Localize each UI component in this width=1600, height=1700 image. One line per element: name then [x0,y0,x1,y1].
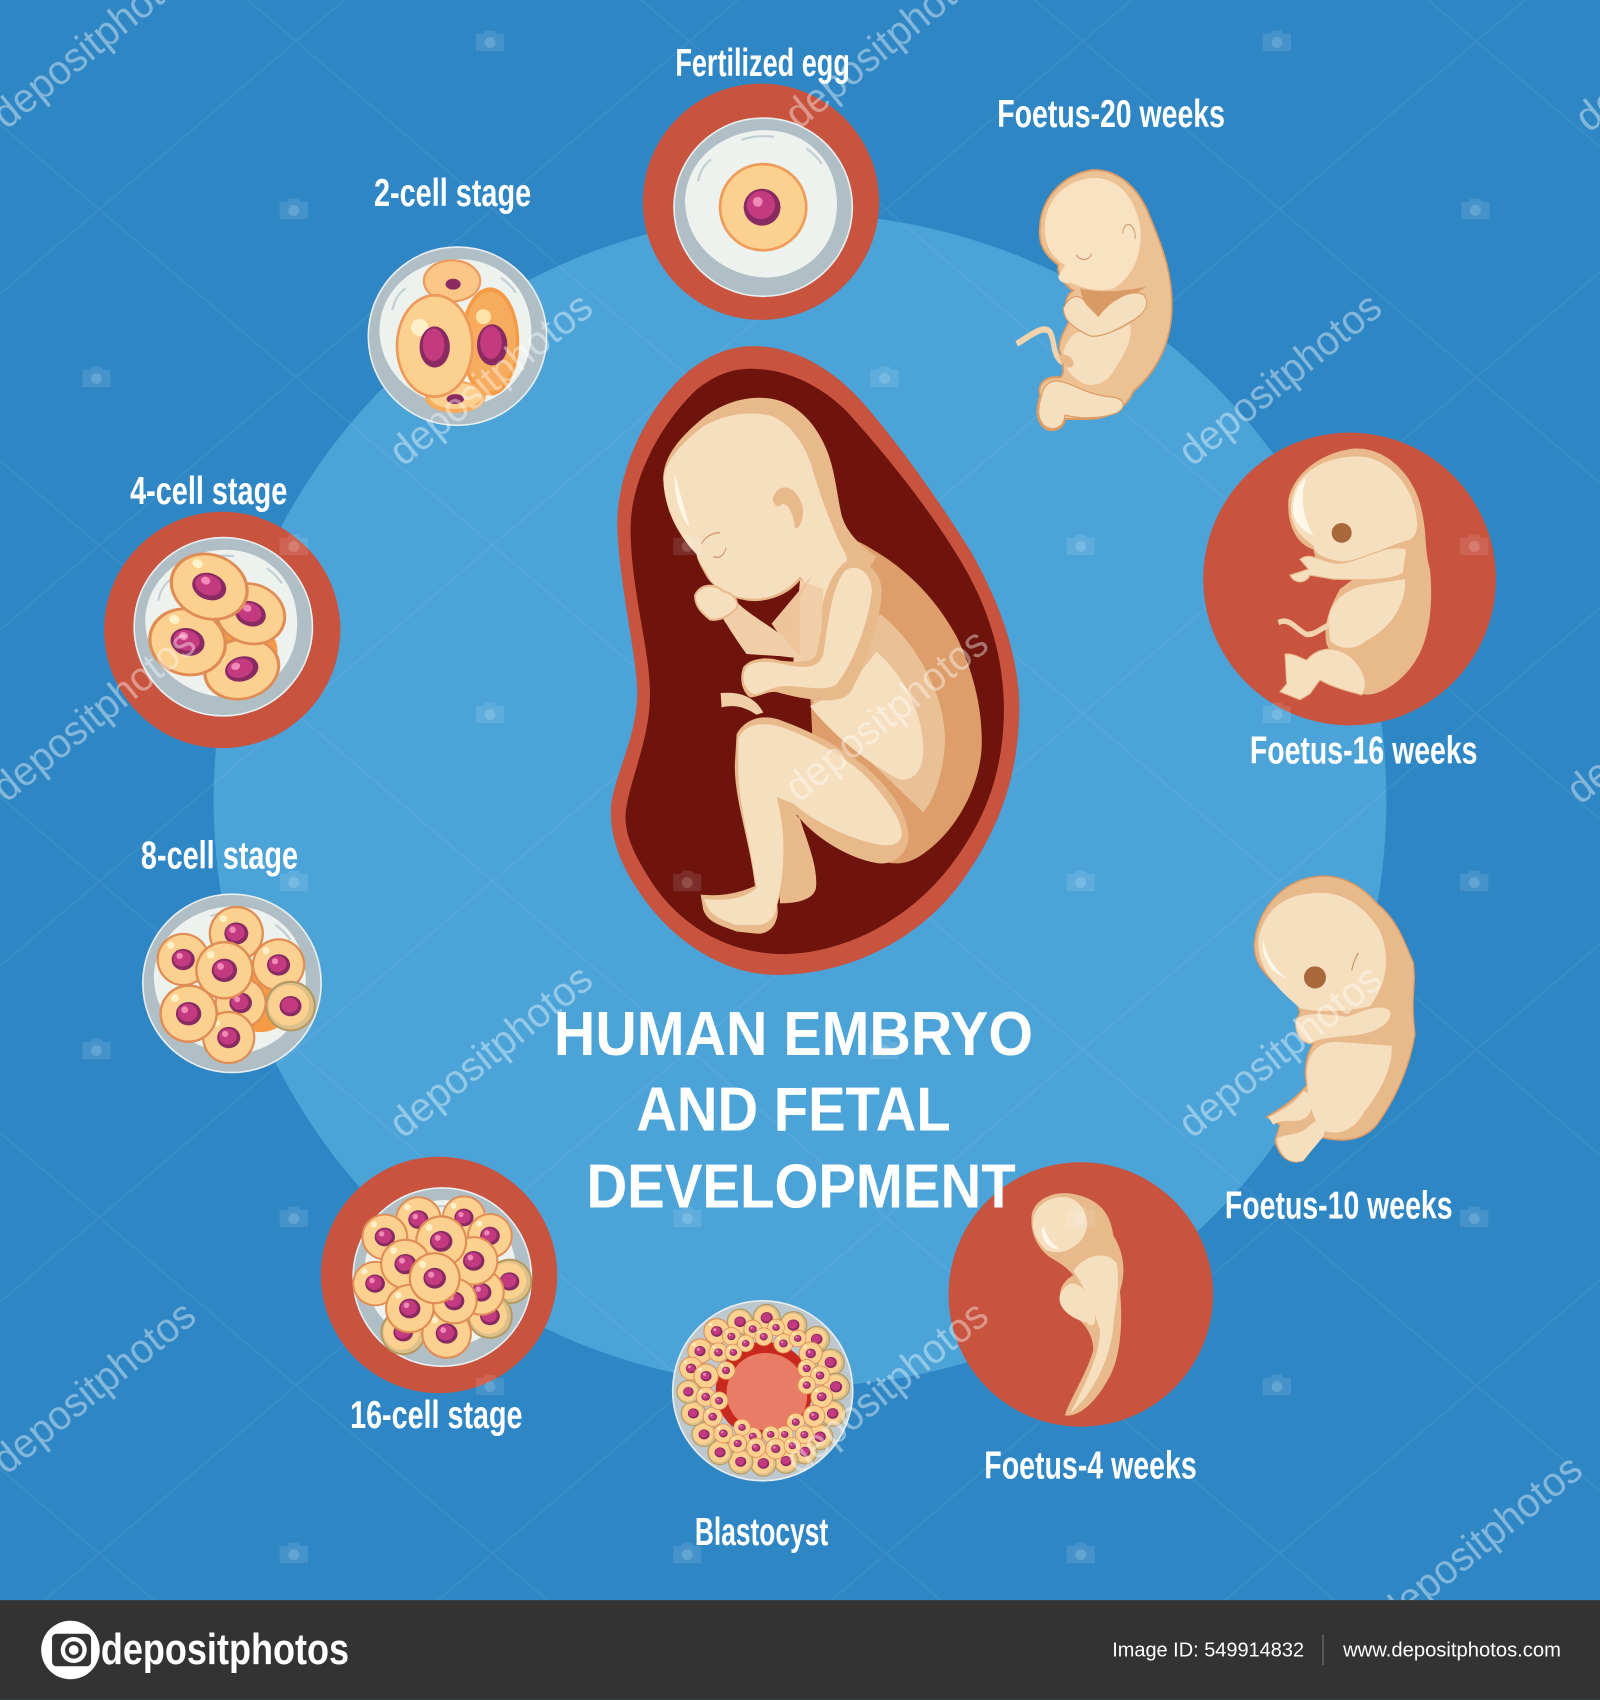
label: blastocyst: Blastocyst [695,1511,828,1554]
label: foetus 4 weeks: Foetus-4 weeks [984,1445,1197,1488]
watermarks: depositphotos [1169,283,1390,474]
stage: 4-cell [104,512,340,748]
stage: foetus 10 weeks [1254,876,1415,1162]
large central circle [214,214,1386,1387]
title: AND FETAL [636,1076,951,1145]
stage: 16-cell [321,1157,557,1393]
label: fertilized egg: Fertilized egg [675,42,850,85]
womb wall [611,346,1019,975]
watermarks: depositphotos [776,1291,997,1482]
watermarks: depositphotos [776,619,997,810]
footer logo icon [41,1621,100,1679]
label: foetus 16 weeks: Foetus-16 weeks [1250,729,1478,772]
label: 2-cell: 2-cell stage [374,172,531,215]
watermark camera icons [82,30,1489,1563]
footer bar [0,1600,1600,1700]
panel: central foetus in womb [611,346,1019,975]
stage: 8-cell [142,893,322,1073]
label: foetus 20 weeks: Foetus-20 weeks [997,93,1225,136]
label: foetus 10 weeks: Foetus-10 weeks [1225,1185,1453,1228]
watermarks: depositphotos [1169,955,1390,1146]
watermarks: depositphotos [1370,1445,1591,1636]
label: 4-cell: 4-cell stage [130,470,287,513]
stage: 2-cell [367,246,547,426]
stage: foetus 20 weeks [1017,170,1172,430]
stage: foetus 4 weeks [949,1162,1213,1427]
title last line: DEVELOPMENT [586,1153,1016,1222]
foetus body [663,398,982,934]
watermarks: depositphotos [380,955,601,1146]
label: 16-cell: 16-cell stage [350,1394,522,1437]
stage: blastocyst [673,1301,853,1481]
watermarks: depositphotos [380,283,601,474]
title: HUMAN EMBRYO [554,1000,1033,1069]
stage: fertilized egg [643,84,879,320]
stage: foetus 16 weeks [1203,433,1496,725]
label: 8-cell: 8-cell stage [141,834,298,877]
footer website: www.depositphotos.com [1342,1639,1561,1662]
footer logo text: depositphotos [101,1626,349,1674]
footer image id: Image ID: 549914832 [1112,1639,1304,1662]
title [554,1000,1033,1145]
womb cavity [626,369,1004,954]
